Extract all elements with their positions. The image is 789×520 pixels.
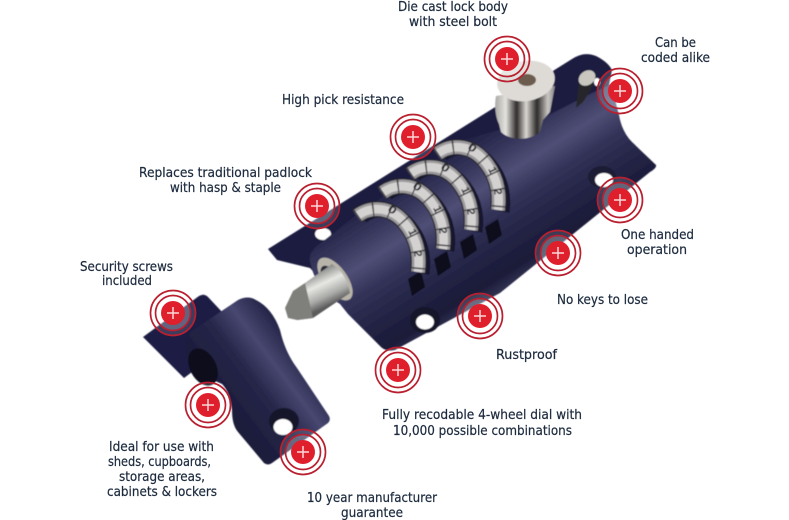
hotspot: manufacturer guarantee: [280, 430, 326, 474]
label: replaces padlock: Replaces traditional padlock: [139, 166, 312, 181]
staple back flange: [143, 295, 223, 378]
label: can be coded alike: Can be: [655, 36, 696, 51]
dial digits: 0: [465, 140, 480, 155]
label: manufacturer guarantee: 10 year manufacturer: [307, 491, 437, 506]
dial digits: 2: [411, 250, 423, 257]
dial digits: [385, 140, 503, 257]
small gap near screw: [594, 78, 600, 86]
label: security screws: Security screws: [80, 260, 173, 275]
hotspot: rustproof: [458, 294, 502, 338]
hotspot: no keys to lose: [536, 230, 580, 276]
label: ideal for sheds: sheds, cupboards,: [108, 455, 211, 470]
dial digits: 2: [464, 208, 476, 215]
staple: [143, 295, 330, 464]
mounting hole: lower: [410, 307, 440, 333]
staple screw hole: [269, 408, 299, 435]
staple opening: [182, 343, 224, 391]
label: high pick resistance: High pick resistance: [282, 93, 404, 108]
label: die cast lock body: [398, 0, 508, 30]
label: security screws: included: [102, 274, 152, 289]
hotspot: can be coded alike: [598, 68, 642, 114]
lock illustration: [143, 54, 656, 464]
label: ideal for sheds: storage areas,: [119, 470, 205, 485]
slots under dial wheels: [408, 219, 502, 296]
back flange of lock plate: [268, 54, 612, 300]
locking knob: [494, 56, 558, 139]
label: can be coded alike: coded alike: [641, 51, 710, 66]
hotspot: one handed operation: [598, 178, 642, 222]
label: die cast lock body: Die cast lock body: [398, 0, 508, 15]
dial wheels: [357, 140, 505, 274]
dial digits: 1: [405, 227, 419, 238]
label: ideal for sheds: cabinets & lockers: [107, 485, 217, 500]
bolt: [285, 252, 359, 320]
dial digits: 1: [430, 204, 444, 215]
mounting hole: right: [588, 166, 616, 188]
dial digits: 2: [436, 227, 448, 234]
label: security screws: [80, 260, 173, 289]
slotted screw: [576, 67, 598, 108]
label: recodable dial: Fully recodable 4-wheel dial with: [382, 408, 582, 423]
label: die cast lock body: with steel bolt: [409, 15, 497, 30]
hotspot: security screws: [150, 290, 196, 336]
label: one handed operation: One handed: [621, 228, 694, 243]
hotspot: die cast lock body: [484, 36, 530, 82]
label: rustproof: Rustproof: [496, 348, 557, 363]
hotspot: ideal for sheds: [186, 382, 230, 428]
label: no keys to lose: No keys to lose: [557, 293, 648, 308]
dial digits: 1: [458, 185, 472, 196]
cylinder and lower plate: [310, 84, 656, 351]
dial digits: 1: [485, 165, 499, 176]
label: replaces padlock: with hasp & staple: [170, 181, 281, 196]
label: ideal for sheds: Ideal for use with: [109, 440, 214, 455]
dial digits: 0: [385, 202, 400, 217]
mounting hole: upper left: [315, 228, 331, 240]
label: can be coded alike: [641, 36, 710, 66]
label: one handed operation: [621, 228, 694, 258]
label: recodable dial: [382, 408, 582, 439]
label: replaces padlock: [139, 166, 312, 196]
dial digits: 0: [438, 160, 453, 175]
label: ideal for sheds: [107, 440, 217, 500]
hotspot: replaces padlock: [294, 184, 340, 228]
staple arch: [185, 298, 330, 464]
dial digits: 0: [410, 179, 425, 194]
dial digits: 2: [491, 188, 503, 195]
label: recodable dial: 10,000 possible combinations: [393, 424, 572, 439]
label: manufacturer guarantee: [307, 491, 437, 520]
hotspot: high pick resistance: [390, 114, 436, 160]
hotspot: recodable dial: [376, 348, 420, 392]
label: one handed operation: operation: [627, 243, 687, 258]
